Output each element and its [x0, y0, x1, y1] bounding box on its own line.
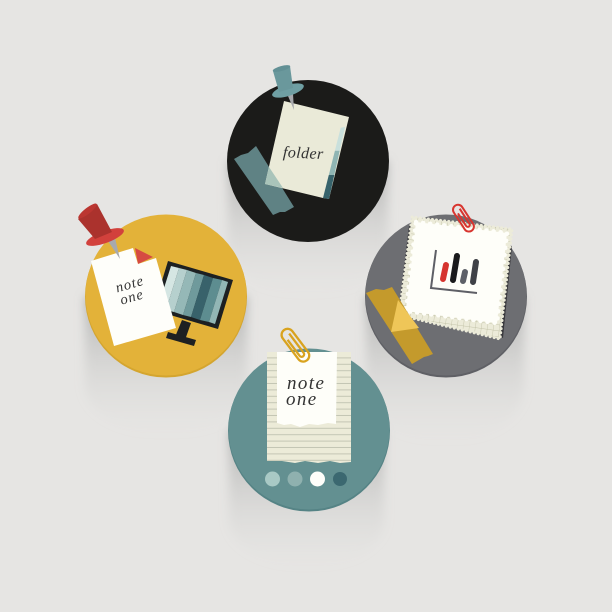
teal push pin	[271, 64, 305, 110]
shadow: black circle	[228, 161, 388, 295]
paper shadow	[400, 226, 512, 338]
bar chart icon	[431, 250, 477, 293]
graph paper sheet	[399, 217, 512, 339]
tape overlap	[265, 167, 283, 188]
red push pin	[77, 202, 126, 259]
red paper clip	[451, 203, 476, 233]
white sheet	[406, 222, 507, 323]
folder side tabs	[323, 127, 345, 199]
note label	[286, 373, 325, 410]
lined sheet	[267, 352, 351, 463]
panel: black folder badge	[227, 64, 389, 242]
note sheet	[91, 248, 176, 346]
folder sheet	[265, 101, 349, 199]
grey-teal tape	[234, 146, 294, 215]
tape overlap	[391, 300, 419, 332]
black circle	[227, 80, 389, 242]
red folded corner	[135, 248, 153, 264]
yellow paper clip	[279, 326, 312, 364]
note label: note	[287, 373, 325, 394]
panel: teal note badge	[228, 326, 390, 512]
yellow tape	[366, 287, 433, 364]
pagination dots	[265, 472, 347, 486]
shadow: teal circle	[229, 430, 384, 568]
folder label: folder	[283, 144, 324, 163]
note label: one	[118, 287, 146, 309]
white note	[277, 352, 337, 427]
shadow: yellow circle	[85, 296, 247, 435]
grey circle	[365, 216, 527, 378]
panel: yellow monitor badge	[77, 202, 247, 378]
note label	[114, 273, 150, 309]
note label: one	[286, 389, 318, 410]
panel: grey chart badge	[365, 203, 527, 378]
yellow circle	[85, 216, 247, 378]
teal circle	[228, 350, 390, 512]
note label: note	[114, 273, 146, 296]
shadow: grey circle	[366, 296, 524, 442]
monitor	[153, 261, 233, 346]
